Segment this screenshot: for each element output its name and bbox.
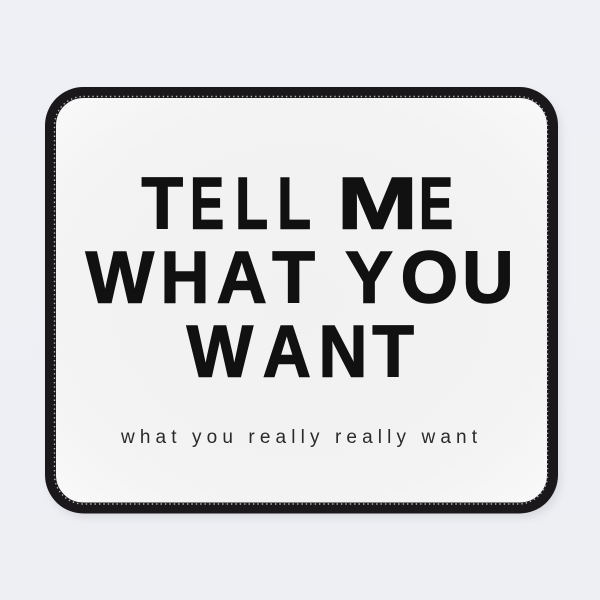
pad surface: [52, 94, 552, 507]
title line 1: L: [277, 164, 310, 244]
title line 3: A: [263, 312, 311, 392]
title line 2: W: [86, 238, 154, 318]
subtitle: what you really really want: [120, 427, 478, 448]
stitching detail: [54, 96, 548, 504]
title line 1: M: [337, 164, 418, 244]
title line 1: E: [419, 164, 453, 244]
title line 3: W: [187, 312, 253, 392]
title line 2: O: [401, 238, 458, 318]
title line 1: E: [190, 164, 224, 244]
title line 2: U: [462, 238, 514, 318]
title line 3: N: [319, 312, 367, 392]
stitched black border: [50, 92, 552, 508]
title line 2: A: [217, 238, 267, 318]
title line 2: T: [272, 238, 315, 318]
pad shadow: [48, 92, 561, 518]
title line 1: T: [142, 164, 183, 244]
title line 2: Y: [345, 238, 393, 318]
title line 1: L: [235, 164, 268, 244]
title: [86, 164, 514, 392]
title line 2: H: [161, 238, 209, 318]
mouse pad: [48, 92, 561, 518]
title line 3: T: [372, 312, 414, 392]
